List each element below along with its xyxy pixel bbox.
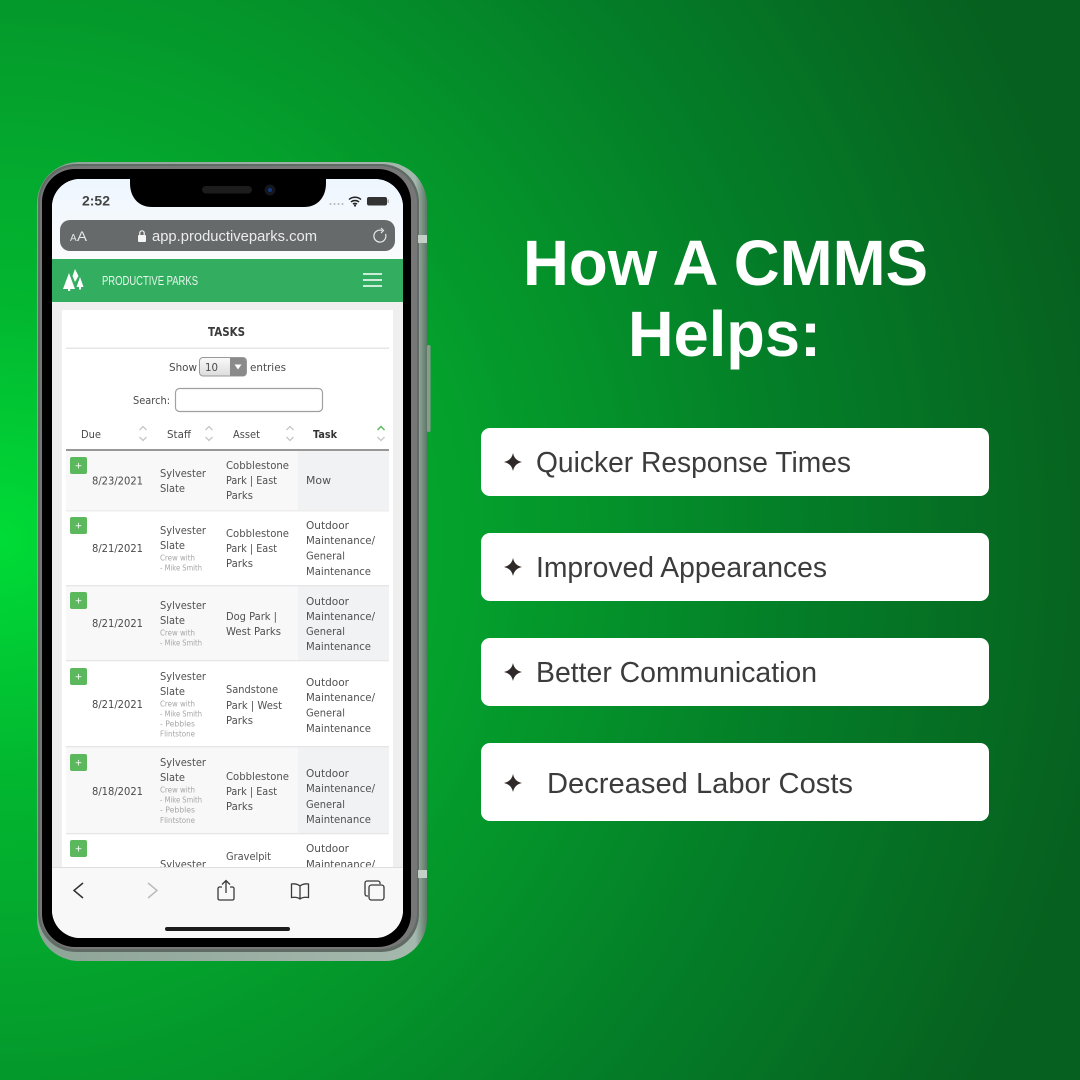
entries selector: 10: [205, 361, 218, 374]
table header: Due: [81, 428, 101, 441]
phone screen: [52, 179, 403, 938]
row 3: Maintenance: [306, 640, 371, 653]
row 1: Park | East: [226, 474, 278, 487]
row 5: Sylvester: [160, 756, 206, 769]
row 2: 8/21/2021: [92, 542, 143, 555]
title: [523, 227, 928, 370]
row 5: +: [75, 758, 82, 768]
row 2: Maintenance/: [306, 534, 375, 547]
icon: bookmarks: [292, 884, 308, 899]
url bar: A: [70, 233, 77, 244]
row 4: - Pebbles: [160, 720, 195, 728]
app header bar: [52, 259, 403, 302]
row 2: Crew with: [160, 554, 195, 562]
row 2: General: [306, 550, 345, 562]
row 1: Cobblestone: [226, 459, 289, 472]
row 1: +: [75, 462, 82, 472]
status time: 2:52: [82, 194, 110, 208]
benefit card: Quicker Response Times: Quicker Response Times: [536, 447, 851, 479]
icon: share: [218, 880, 234, 900]
row 5: Maintenance/: [306, 782, 375, 795]
row 4: - Mike Smith: [160, 710, 202, 718]
row 4: Sandstone: [226, 683, 278, 696]
row 3: [66, 585, 389, 661]
row 4: Parks: [226, 714, 253, 727]
row 6: Sylvester: [160, 858, 206, 871]
row 6: [66, 833, 389, 867]
row 2: Park | East: [226, 542, 278, 555]
row 2: [66, 510, 389, 578]
app header bar: PRODUCTIVE PARKS: [102, 273, 198, 288]
benefit card: Better Communication: Better Communication: [536, 657, 817, 689]
row 5: Crew with: [160, 786, 195, 794]
row 4: +: [75, 672, 82, 682]
row 1: Parks: [226, 489, 253, 502]
home indicator: [165, 927, 290, 931]
benefit card: Decreased Labor Costs: [481, 743, 989, 821]
row 1: Sylvester: [160, 467, 206, 480]
icon: tree logo: [63, 269, 84, 291]
row 3: Crew with: [160, 628, 195, 638]
table header: Staff: [167, 428, 191, 441]
url bar: app.productiveparks.com: [152, 228, 317, 245]
benefit card: Decreased Labor Costs: Decreased Labor Costs: [547, 768, 853, 800]
row 1: Slate: [160, 482, 185, 495]
row 4: Maintenance/: [306, 691, 375, 704]
tasks card: [62, 310, 393, 880]
benefit card: Better Communication: [481, 638, 989, 706]
signal, wifi and battery icons: [330, 197, 389, 207]
title: Helps:: [628, 298, 821, 370]
row 5: Flintstone: [160, 816, 195, 825]
row 3: +: [75, 596, 82, 606]
row 2: Maintenance: [306, 565, 371, 578]
row 5: Outdoor: [306, 767, 349, 780]
table header: Task: [313, 428, 338, 441]
row 5: - Mike Smith: [160, 796, 202, 804]
row 4: [66, 660, 389, 738]
row 5: 8/18/2021: [92, 785, 143, 798]
search box: [133, 388, 322, 412]
row 4: Maintenance: [306, 722, 371, 735]
row 5: - Pebbles: [160, 806, 195, 814]
phone mockup: [37, 162, 430, 961]
row 4: Flintstone: [160, 730, 195, 738]
url bar: A: [77, 228, 88, 244]
row 2: Slate: [160, 539, 185, 552]
row 3: Dog Park |: [226, 610, 277, 623]
row 3: Maintenance/: [306, 610, 375, 623]
icon: star: [504, 453, 522, 471]
icon: back: [74, 883, 83, 898]
icon: star: [504, 663, 522, 681]
table header: [66, 426, 389, 451]
row 5: Parks: [226, 800, 253, 813]
row 5: Slate: [160, 771, 185, 784]
icon: star: [504, 774, 522, 792]
row 2: - Mike Smith: [160, 564, 202, 572]
phone body: [37, 162, 430, 961]
row 2: Cobblestone: [226, 527, 289, 540]
row 4: Park | West: [226, 699, 283, 712]
status bar background: [52, 179, 403, 260]
tasks heading: TASKS: [208, 325, 245, 339]
row 3: Sylvester: [160, 599, 206, 612]
entries selector: Show: [169, 361, 197, 374]
row 1: [66, 451, 389, 510]
benefit card: Improved Appearances: Improved Appearances: [536, 552, 827, 584]
row 2: Parks: [226, 557, 253, 570]
row 5: Park | East: [226, 785, 278, 798]
row 6: +: [75, 844, 82, 854]
row 3: Slate: [160, 614, 185, 627]
benefit card: Improved Appearances: [481, 533, 989, 601]
row 2: Outdoor: [306, 519, 349, 532]
icon: tabs: [365, 881, 384, 900]
search box: Search:: [133, 394, 170, 407]
title: How A CMMS: [523, 227, 928, 299]
row 6: Gravelpit: [226, 850, 272, 863]
row 6: Outdoor: [306, 842, 349, 855]
row 3: - Mike Smith: [160, 638, 202, 648]
row 2: +: [75, 522, 82, 532]
row 6: Maintenance/: [306, 858, 375, 871]
row 4: General: [306, 706, 345, 720]
browser toolbar: [52, 867, 403, 938]
row 5: Maintenance: [306, 813, 371, 826]
row 3: General: [306, 625, 345, 638]
row 3: West Parks: [226, 625, 281, 638]
row 4: 8/21/2021: [92, 698, 143, 711]
icon: forward: [148, 883, 157, 898]
benefit card: Quicker Response Times: [481, 428, 989, 496]
row 3: Outdoor: [306, 595, 349, 608]
row 3: 8/21/2021: [92, 617, 143, 630]
row 5: Cobblestone: [226, 770, 289, 783]
icon: star: [504, 558, 522, 576]
row 2: Sylvester: [160, 524, 206, 537]
row 1: Mow: [306, 474, 331, 487]
url bar: [60, 220, 395, 251]
row 5: General: [306, 798, 345, 811]
row 4: Outdoor: [306, 676, 349, 689]
row 4: Slate: [160, 685, 185, 698]
row 4: Sylvester: [160, 670, 206, 683]
notch: [130, 178, 326, 207]
entries selector: entries: [250, 361, 286, 374]
row 4: Crew with: [160, 700, 195, 708]
row 1: 8/23/2021: [92, 474, 143, 488]
row 5: [66, 746, 389, 833]
table header: Asset: [233, 428, 261, 441]
entries selector: [169, 358, 286, 376]
